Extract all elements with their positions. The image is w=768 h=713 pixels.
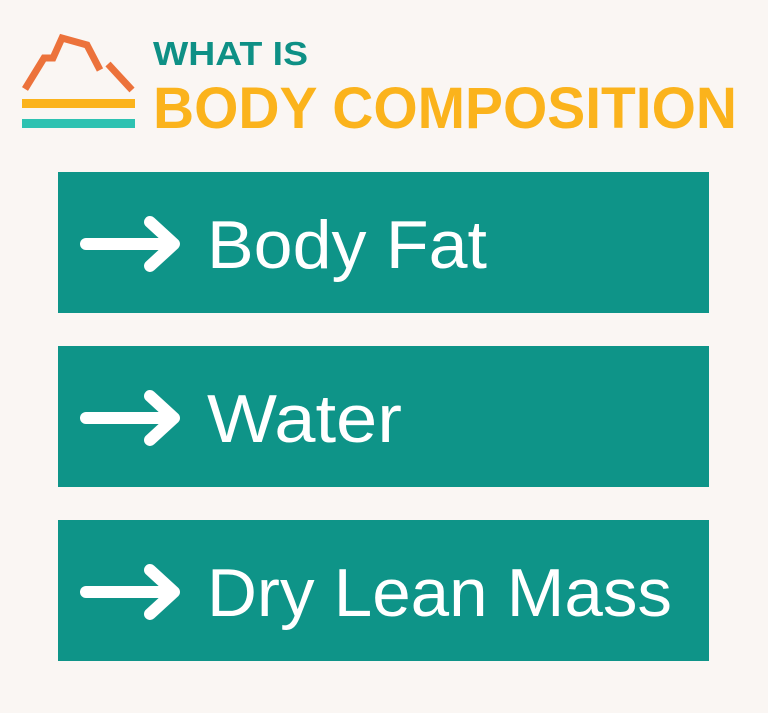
icon: arrow (86, 222, 174, 266)
logo: mountain and bars (22, 38, 135, 128)
panel: water (58, 346, 709, 487)
panel: water: Water (207, 381, 402, 457)
icon: arrow (86, 396, 174, 440)
icon: arrow (86, 570, 174, 614)
panel: body fat (58, 172, 709, 313)
title: what is: WHAT IS (153, 35, 308, 72)
title: body composition: BODY COMPOSITION (153, 76, 737, 141)
panel: dry lean mass (58, 520, 709, 661)
panel: dry lean mass: Dry Lean Mass (207, 555, 672, 631)
panel: body fat: Body Fat (207, 207, 487, 283)
